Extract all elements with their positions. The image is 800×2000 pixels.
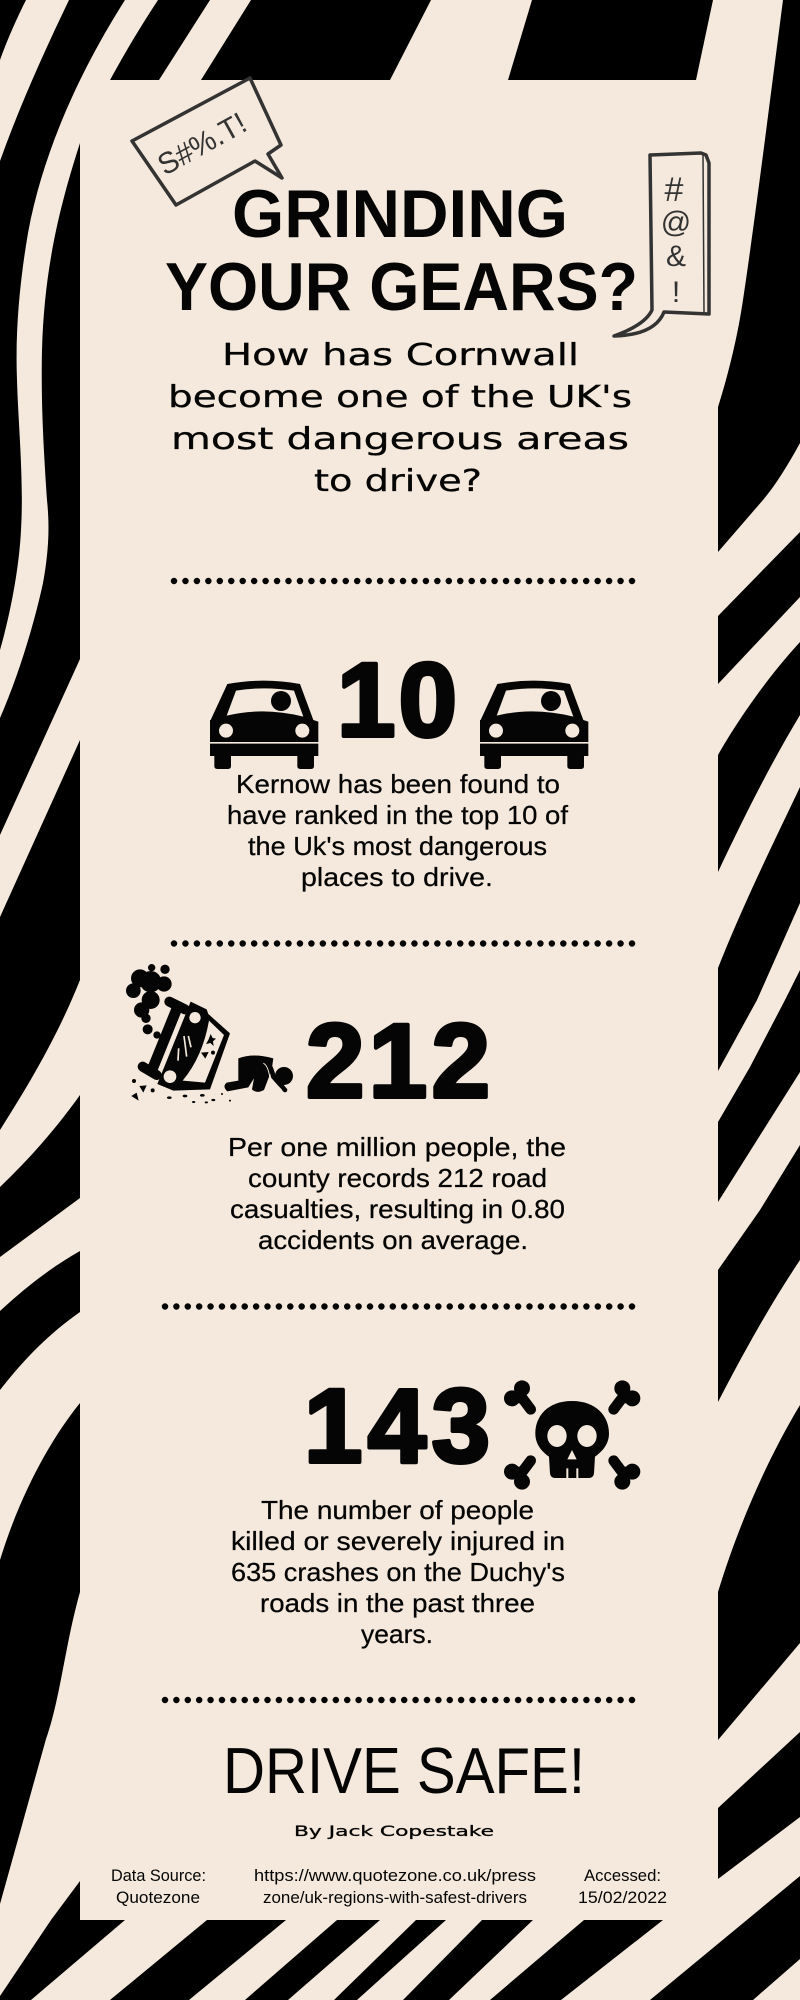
text block: casualties: county records 212 road	[248, 1163, 547, 1193]
text block: top 10: Kernow has been found to	[236, 769, 560, 799]
text block: top 10	[227, 769, 569, 892]
text block: killed or injured: roads in the past three	[260, 1588, 535, 1618]
text block: top 10: the Uk's most dangerous	[248, 831, 547, 861]
statistic number: 143: 143	[304, 1368, 490, 1485]
text block: killed or injured: 635 crashes on the Duchy's	[231, 1557, 565, 1587]
icon: vertical speech bubble with symbols: @	[661, 206, 691, 239]
subtitle	[168, 338, 632, 499]
subtitle: How has Cornwall	[222, 338, 579, 373]
closing heading: DRIVE SAFE!	[223, 1734, 585, 1807]
text block: top 10: places to drive.	[301, 862, 493, 892]
statistic: 212 with crash icon	[126, 964, 490, 1120]
icon: vertical speech bubble with symbols: &	[666, 240, 686, 273]
subtitle: to drive?	[314, 464, 482, 499]
text block: top 10: have ranked in the top 10 of	[227, 800, 569, 830]
subtitle: most dangerous areas	[171, 422, 629, 457]
icon: vertical speech bubble with symbols: #	[665, 171, 684, 209]
footer: data source: Quotezone	[116, 1888, 200, 1907]
icon: skull and crossbones	[504, 1380, 640, 1490]
title: YOUR GEARS?	[165, 249, 638, 325]
subtitle: become one of the UK's	[168, 380, 632, 415]
text block: casualties	[228, 1132, 566, 1255]
icon: left car	[210, 681, 318, 769]
icon: speech bubble with censored swear: S#%.T!	[152, 107, 252, 182]
footer: source URL: zone/uk-regions-with-safest-drivers	[263, 1888, 527, 1907]
footer: data source	[111, 1866, 206, 1907]
icon: speech bubble with censored swear	[132, 78, 282, 205]
icon: vertical speech bubble with symbols	[614, 153, 709, 336]
icon: vertical speech bubble with symbols: !	[672, 276, 680, 309]
statistic: 10 with car icons	[210, 642, 588, 769]
text block: killed or injured: The number of people	[261, 1495, 534, 1525]
panel: cream content area	[80, 80, 718, 1920]
icon: right car	[480, 681, 588, 769]
footer: source URL	[254, 1866, 536, 1907]
icon: crashed car and injured person	[126, 964, 293, 1103]
text block: casualties: casualties, resulting in 0.80	[230, 1194, 565, 1224]
footer: access date: 15/02/2022	[578, 1888, 667, 1907]
title: GRINDING	[232, 176, 568, 252]
text block: casualties: Per one million people, the	[228, 1132, 566, 1162]
text block: killed or injured: years.	[361, 1619, 433, 1649]
footer: data source: Data Source:	[111, 1866, 206, 1885]
text block: killed or injured: killed or severely injured in	[231, 1526, 565, 1556]
footer: access date	[578, 1866, 667, 1907]
footer: source URL: https://www.quotezone.co.uk/press	[254, 1866, 536, 1885]
footer: access date: Accessed:	[584, 1866, 661, 1885]
statistic number: 10: 10	[337, 642, 457, 759]
statistic number: 212: 212	[306, 1003, 490, 1120]
text block: killed or injured	[231, 1495, 565, 1649]
text block: casualties: accidents on average.	[258, 1225, 528, 1255]
author credit: By Jack Copestake	[294, 1824, 494, 1840]
title	[165, 176, 638, 325]
statistic: 143 with skull icon	[304, 1368, 640, 1490]
